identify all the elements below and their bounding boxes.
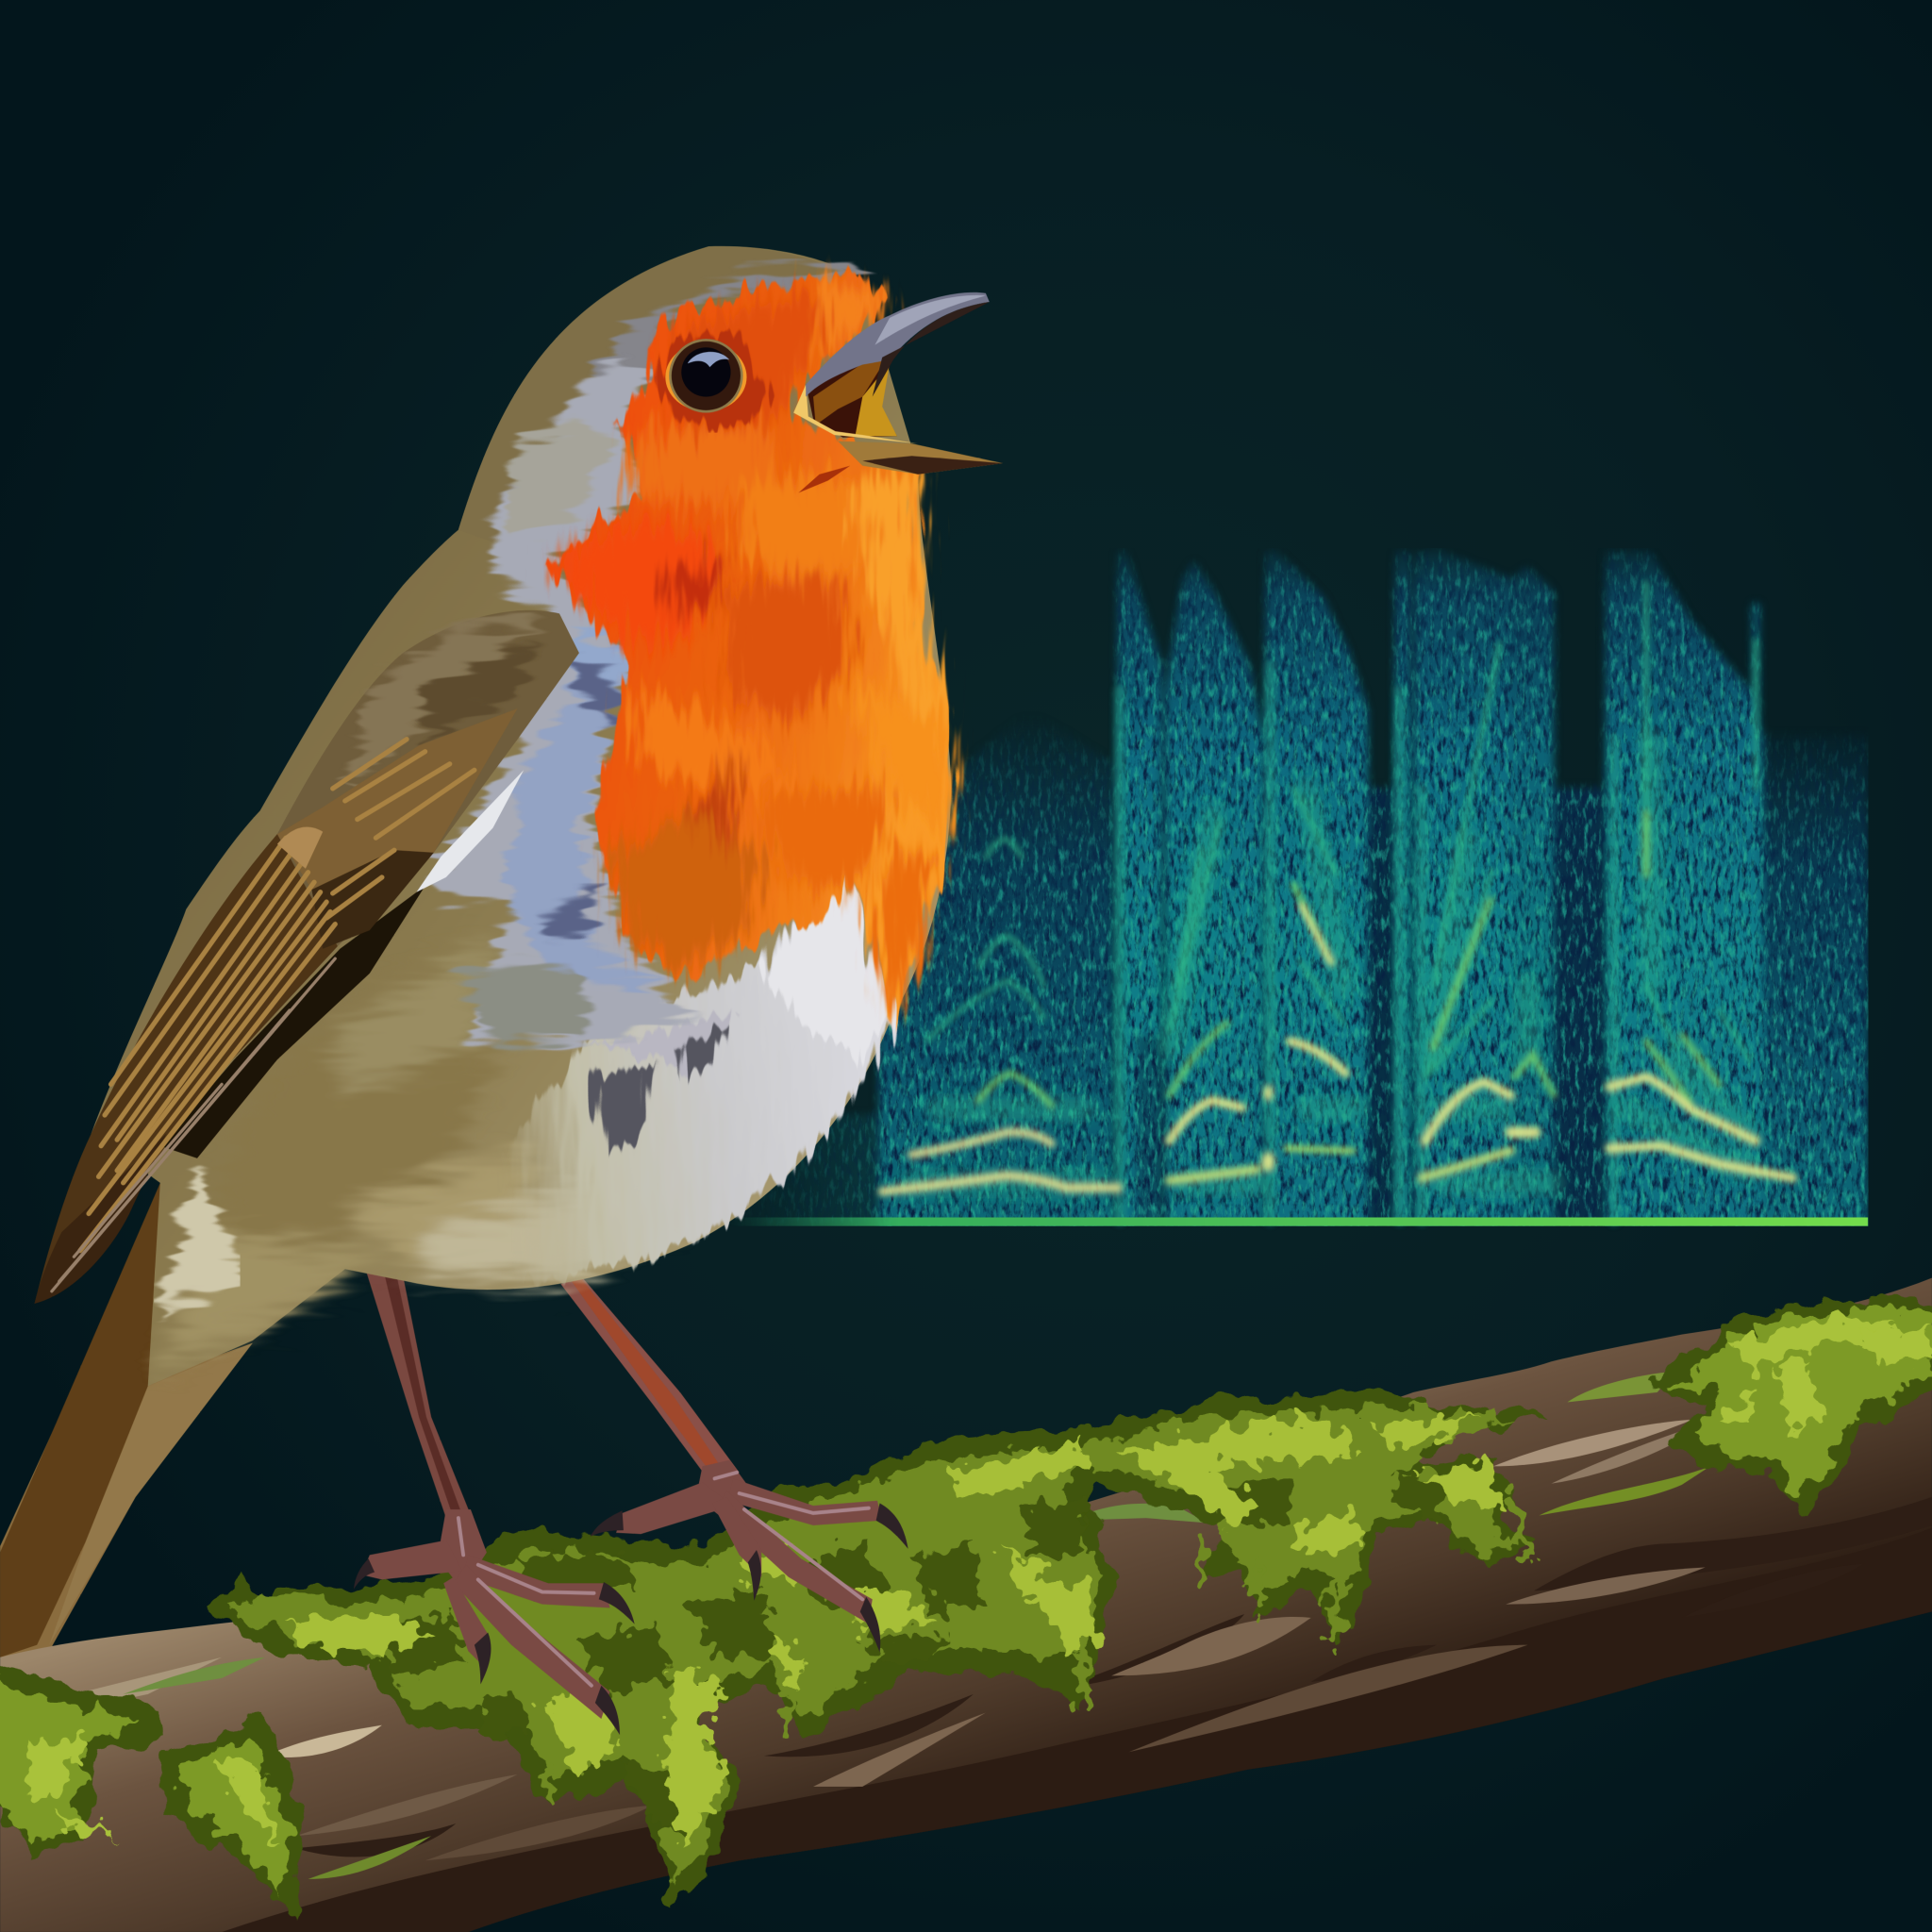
bird body bbox=[92, 246, 951, 1386]
robin bbox=[35, 246, 1003, 1386]
bark dark gashes bbox=[295, 1497, 1932, 1857]
primary feathers base bbox=[35, 834, 338, 1304]
moss: left bbox=[0, 1657, 302, 1920]
branch bbox=[0, 1277, 1932, 1932]
pale vent patch bbox=[160, 1164, 234, 1319]
moss drips bbox=[548, 1497, 1528, 1802]
grey neck and flank bbox=[425, 358, 690, 1047]
upper beak bbox=[806, 292, 990, 397]
leg: left bbox=[365, 1263, 472, 1518]
spectrogram bright harmonics bbox=[882, 583, 1792, 1220]
dark underwing bbox=[160, 886, 425, 1158]
green streaks on bark bbox=[124, 1372, 1710, 1879]
bark tan highlights bbox=[0, 1420, 1710, 1860]
lower beak bbox=[838, 441, 1003, 475]
moss dark patches bbox=[370, 1473, 1454, 1836]
wing bbox=[35, 610, 579, 1304]
breast feather layers bbox=[555, 271, 951, 1017]
eye ring shading bbox=[656, 330, 766, 425]
spectrogram bbox=[727, 548, 1868, 1226]
belly grey patches bbox=[588, 1025, 729, 1152]
wing feather stripes bbox=[80, 740, 475, 1251]
pale long feather edges bbox=[52, 958, 335, 1291]
secondary brown feathers bbox=[277, 708, 518, 890]
crown grey bbox=[591, 269, 862, 391]
foot: right bbox=[591, 1460, 908, 1653]
claws bbox=[591, 1503, 908, 1653]
foot: left bbox=[354, 1509, 635, 1735]
eye bbox=[665, 339, 747, 413]
moss: right bbox=[1654, 1293, 1932, 1510]
belly white bbox=[468, 877, 893, 1288]
leg: right bbox=[560, 1276, 740, 1485]
spectrogram base line bbox=[727, 1217, 1868, 1226]
open mouth bbox=[793, 345, 918, 443]
orange breast and face bbox=[548, 271, 951, 1023]
bark dark bottom band bbox=[222, 1528, 1932, 1932]
wing tip dark bbox=[35, 1134, 166, 1304]
crown and nape olive bbox=[458, 247, 857, 542]
claws bbox=[354, 1558, 635, 1735]
throat dark mark bbox=[798, 466, 850, 492]
tail bbox=[0, 1183, 253, 1657]
dark feather bbox=[311, 850, 434, 949]
lower flank feathers bbox=[160, 937, 677, 1368]
wing coverts bbox=[277, 610, 579, 946]
moss: main clump bbox=[207, 1392, 1550, 1907]
grey blue dark streaks bbox=[536, 653, 628, 937]
wing white edge bbox=[416, 770, 524, 892]
